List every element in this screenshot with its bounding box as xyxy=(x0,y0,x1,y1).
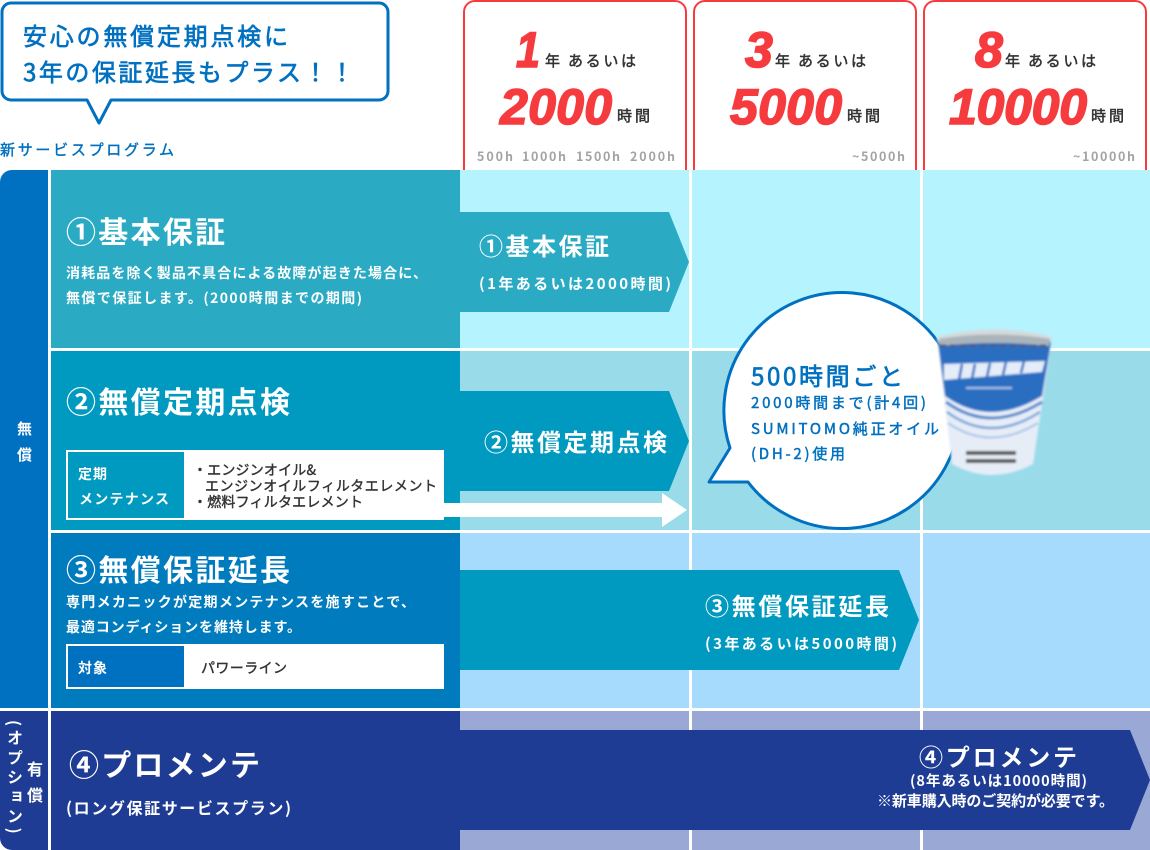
arrow: free warranty extension period: ③無償保証延長 xyxy=(705,587,889,622)
heading: new service program: 新サービスプログラム xyxy=(0,139,174,160)
panel: paid option category tab: 有 xyxy=(27,756,43,780)
panel: free warranty extension xyxy=(51,533,460,708)
arrow: basic warranty period: (1年あるいは2000時間) xyxy=(479,273,671,294)
panel: basic warranty: 無償で保証します。(2000時間までの期間) xyxy=(66,288,362,308)
panel: 1 year column header: 1000h xyxy=(522,146,566,165)
panel: 1 year column header: 1500h xyxy=(576,146,620,165)
arrow: basic warranty period xyxy=(460,212,689,312)
panel: 1 year column header: 500h xyxy=(477,146,513,165)
arrow: Pro Mainte period: ④プロメンテ xyxy=(919,738,1077,773)
callout: oil change every 500 hours: SUMITOMO純正オイル xyxy=(751,418,939,439)
panel: basic warranty: ①基本保証 xyxy=(66,208,225,252)
callout: headline speech bubble: 安心の無償定期点検に xyxy=(23,17,288,52)
panel: 1 year column header: 1 xyxy=(516,22,540,78)
panel: free category tab: 償 xyxy=(17,444,32,465)
panel: free periodic inspection xyxy=(51,351,460,530)
panel: 3 year column header xyxy=(694,1,916,171)
table: scheduled maintenance: 定期 xyxy=(78,464,107,484)
panel: 3 year column header: ~5000h xyxy=(852,146,905,165)
panel: free warranty extension: 専門メカニックが定期メンテナンスを施すことで、 xyxy=(66,592,415,612)
panel: 3 year column header: 3 xyxy=(745,22,773,78)
callout: headline speech bubble xyxy=(2,3,388,123)
panel: free category tab: 無 xyxy=(17,418,32,439)
panel: basic warranty: 消耗品を除く製品不具合による故障が起きた場合に、 xyxy=(66,263,427,283)
arrow: Pro Mainte period: ※新車購入時のご契約が必要です。 xyxy=(877,790,1114,811)
panel: 8 year column header: あるいは xyxy=(1028,50,1096,71)
table: target xyxy=(66,644,444,689)
arrow: Pro Mainte period xyxy=(460,730,1150,830)
panel: Pro Mainte xyxy=(51,711,460,850)
panel: 1 year column header: 2000 xyxy=(499,79,612,135)
arrow: free warranty extension period: (3年あるいは5000時間) xyxy=(705,633,897,654)
panel: 1 year column header: 時間 xyxy=(617,105,650,126)
panel: free periodic inspection: ②無償定期点検 xyxy=(66,378,290,422)
panel: 1 year column header xyxy=(464,1,686,171)
callout: oil change every 500 hours: 2000時間まで(計4回) xyxy=(751,392,926,413)
panel: free warranty extension: ③無償保証延長 xyxy=(66,546,290,590)
panel: 8 year column header: 年 xyxy=(1005,50,1020,71)
arrow: white maintenance pointer xyxy=(444,493,687,527)
panel: 3 year column header: 年 xyxy=(775,50,790,71)
table: scheduled maintenance: メンテナンス xyxy=(79,489,169,509)
panel: Pro Mainte: (ロング保証サービスプラン) xyxy=(66,795,291,819)
panel: 8 year column header: 時間 xyxy=(1091,105,1124,126)
panel: paid option category tab: (オプション) xyxy=(3,720,27,837)
panel: Pro Mainte: ④プロメンテ xyxy=(69,741,260,785)
panel: basic warranty xyxy=(51,170,460,348)
callout: oil change every 500 hours xyxy=(709,293,960,529)
callout: oil change every 500 hours: 500時間ごと xyxy=(751,357,903,392)
panel: 8 year column header xyxy=(924,1,1146,171)
arrow: free periodic inspection period xyxy=(460,391,689,491)
grid: coverage timeline background xyxy=(460,170,1150,850)
arrow: Pro Mainte period: (8年あるいは10000時間) xyxy=(910,770,1087,791)
panel: 8 year column header: 10000 xyxy=(949,79,1087,135)
table: target: 対象 xyxy=(78,658,107,678)
panel: free warranty extension: 最適コンディションを維持します。 xyxy=(66,617,301,637)
arrow: free periodic inspection period: ②無償定期点検 xyxy=(484,423,667,458)
panel: 1 year column header: 2000h xyxy=(630,146,675,165)
panel: 1 year column header: 年 xyxy=(545,50,560,71)
table: target: パワーライン xyxy=(201,658,287,678)
icon: oil can xyxy=(937,330,1052,475)
panel: paid option category tab: 償 xyxy=(27,782,43,806)
panel: 3 year column header: 時間 xyxy=(847,105,880,126)
panel: 3 year column header: 5000 xyxy=(730,79,842,135)
table: scheduled maintenance: ・燃料フィルタエレメント xyxy=(193,492,363,512)
panel: 1 year column header: あるいは xyxy=(568,50,636,71)
panel: free category tab xyxy=(0,170,48,708)
table: scheduled maintenance xyxy=(66,450,444,520)
panel: paid option category tab xyxy=(0,711,48,850)
table: scheduled maintenance: ・エンジンオイル& xyxy=(193,460,316,480)
table: scheduled maintenance: エンジンオイルフィルタエレメント xyxy=(205,476,437,496)
callout: headline speech bubble: 3年の保証延長もプラス！！ xyxy=(23,53,354,88)
panel: 3 year column header: あるいは xyxy=(798,50,866,71)
panel: 8 year column header: 8 xyxy=(975,22,1003,78)
panel: 8 year column header: ~10000h xyxy=(1073,146,1135,165)
arrow: basic warranty period: ①基本保証 xyxy=(479,227,609,262)
arrow: free warranty extension period xyxy=(460,570,919,670)
callout: oil change every 500 hours: (DH-2)使用 xyxy=(751,443,845,464)
